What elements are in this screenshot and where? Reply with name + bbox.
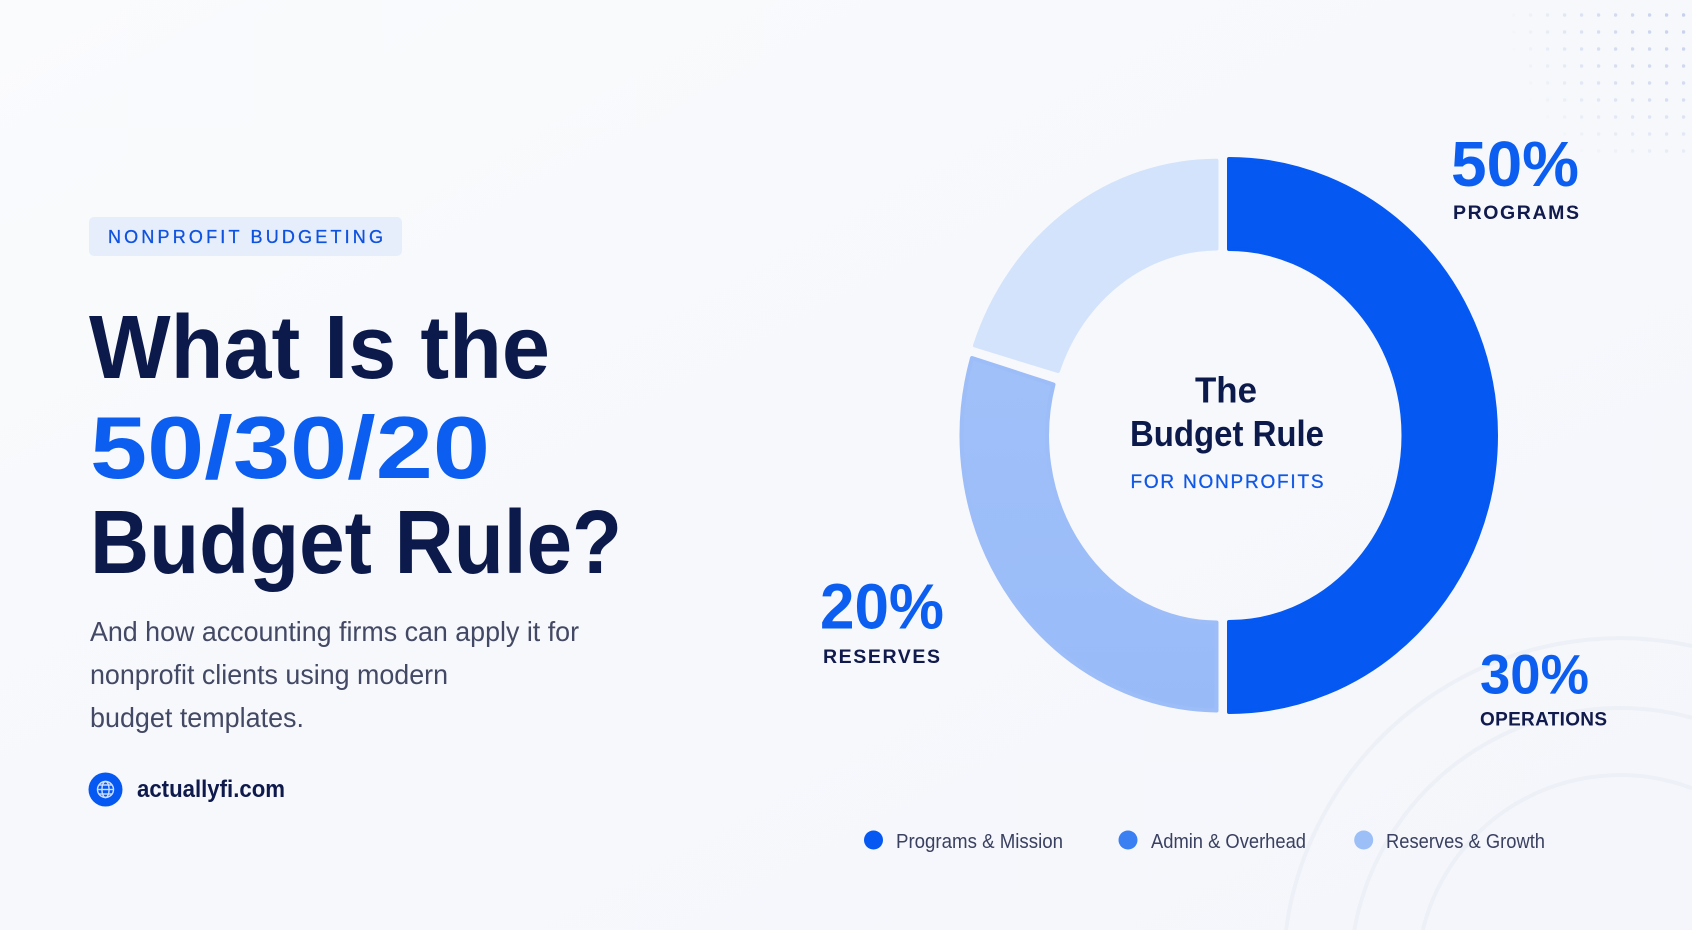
callout: 50% programs: 50% [1451, 128, 1579, 200]
segment: light blue [975, 161, 1216, 371]
segment: reserves mid blue [962, 358, 1216, 710]
title: What Is the [89, 298, 550, 398]
callout: 30% operations [1480, 642, 1607, 730]
subtitle: budget templates. [90, 702, 304, 733]
donut center text [1130, 370, 1324, 493]
subtitle: nonprofit clients using modern [90, 659, 448, 690]
donut chart [962, 159, 1496, 712]
title [89, 298, 622, 593]
concentric arcs bottom right [1286, 638, 1692, 930]
subtitle: And how accounting firms can apply it for [90, 616, 579, 647]
donut center text: FOR NONPROFITS [1130, 472, 1324, 493]
tag pill: NONPROFIT BUDGETING [108, 227, 383, 247]
donut center text: The [1195, 370, 1257, 410]
callout: 20% reserves: 20% [820, 570, 944, 642]
website link: actuallyfi.com [137, 776, 285, 803]
legend item: programs: Programs & Mission [896, 831, 1063, 853]
legend [864, 830, 1545, 853]
legend item: reserves: Reserves & Growth [1386, 831, 1545, 853]
segment: programs 50% [1229, 159, 1496, 712]
legend item: admin: Admin & Overhead [1151, 831, 1306, 853]
website link [88, 772, 285, 806]
title: 50/30/20 [90, 398, 490, 497]
dot pattern top right [1529, 13, 1686, 152]
callout: 20% reserves: RESERVES [823, 646, 940, 668]
callout: 30% operations: OPERATIONS [1480, 710, 1607, 730]
subtitle [90, 616, 579, 733]
callout: 30% operations: 30% [1480, 642, 1589, 706]
tag pill [89, 217, 402, 256]
title: Budget Rule? [90, 493, 622, 593]
icon: globe [88, 772, 122, 806]
callout: 50% programs: PROGRAMS [1453, 202, 1579, 224]
donut center text: Budget Rule [1130, 413, 1324, 454]
